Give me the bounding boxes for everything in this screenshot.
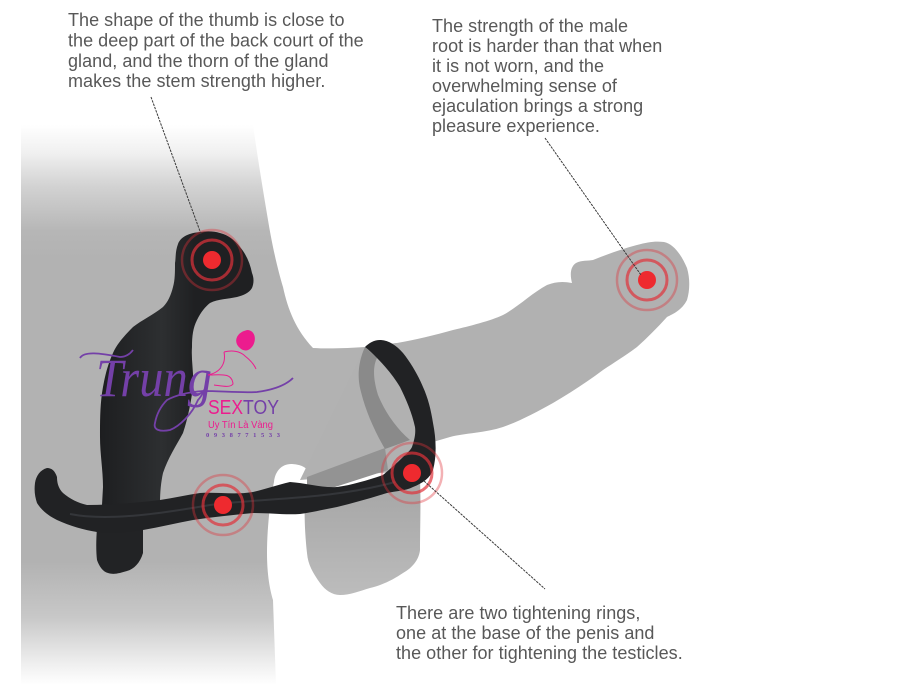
text block: top left: The shape of the thumb is close to xyxy=(68,10,345,30)
text block: top right: it is not worn, and the xyxy=(432,56,604,76)
back of ring, shadowed xyxy=(307,347,410,490)
text block: bottom: one at the base of the penis and xyxy=(396,623,654,643)
logo script name: Trung xyxy=(96,348,212,408)
target marker: ring joint xyxy=(382,443,442,503)
leader line: bottom xyxy=(424,481,545,589)
grey lower silhouette xyxy=(305,480,420,595)
logo emblem xyxy=(208,330,256,386)
text block: top right: ejaculation brings a strong xyxy=(432,96,643,116)
toy: base handle xyxy=(96,528,143,574)
text block: bottom: the other for tightening the testicles. xyxy=(396,643,683,663)
text block: top left: gland, and the thorn of the gland xyxy=(68,51,329,71)
text block: bottom: There are two tightening rings, xyxy=(396,603,640,623)
watermark logo xyxy=(80,330,293,439)
logo brand text: SEX xyxy=(208,397,243,419)
grey body silhouette xyxy=(21,125,400,685)
text block: top left: the deep part of the back court of the xyxy=(68,30,364,50)
text block: top right: overwhelming sense of xyxy=(432,76,618,96)
target marker: tip xyxy=(617,250,677,310)
leader line: top left xyxy=(151,97,201,234)
target marker: strap xyxy=(193,475,253,535)
toy: strap and front ring xyxy=(35,340,436,533)
logo slogan: Uy Tín Là Vàng xyxy=(208,420,273,431)
watermark logo: TOY xyxy=(243,397,279,419)
text block: top left: makes the stem strength higher. xyxy=(68,71,325,91)
grey shaft silhouette xyxy=(300,242,689,480)
logo phone: 0938771533 xyxy=(206,432,281,439)
logo swoosh xyxy=(80,350,293,431)
text block: top right: The strength of the male xyxy=(432,16,628,36)
target marker: head xyxy=(182,230,242,290)
leader line: top right xyxy=(545,138,641,275)
text block: top right: pleasure experience. xyxy=(432,116,600,136)
text block: top right: root is harder than that when xyxy=(432,36,662,56)
toy: angled stem with rounded head xyxy=(100,231,254,505)
